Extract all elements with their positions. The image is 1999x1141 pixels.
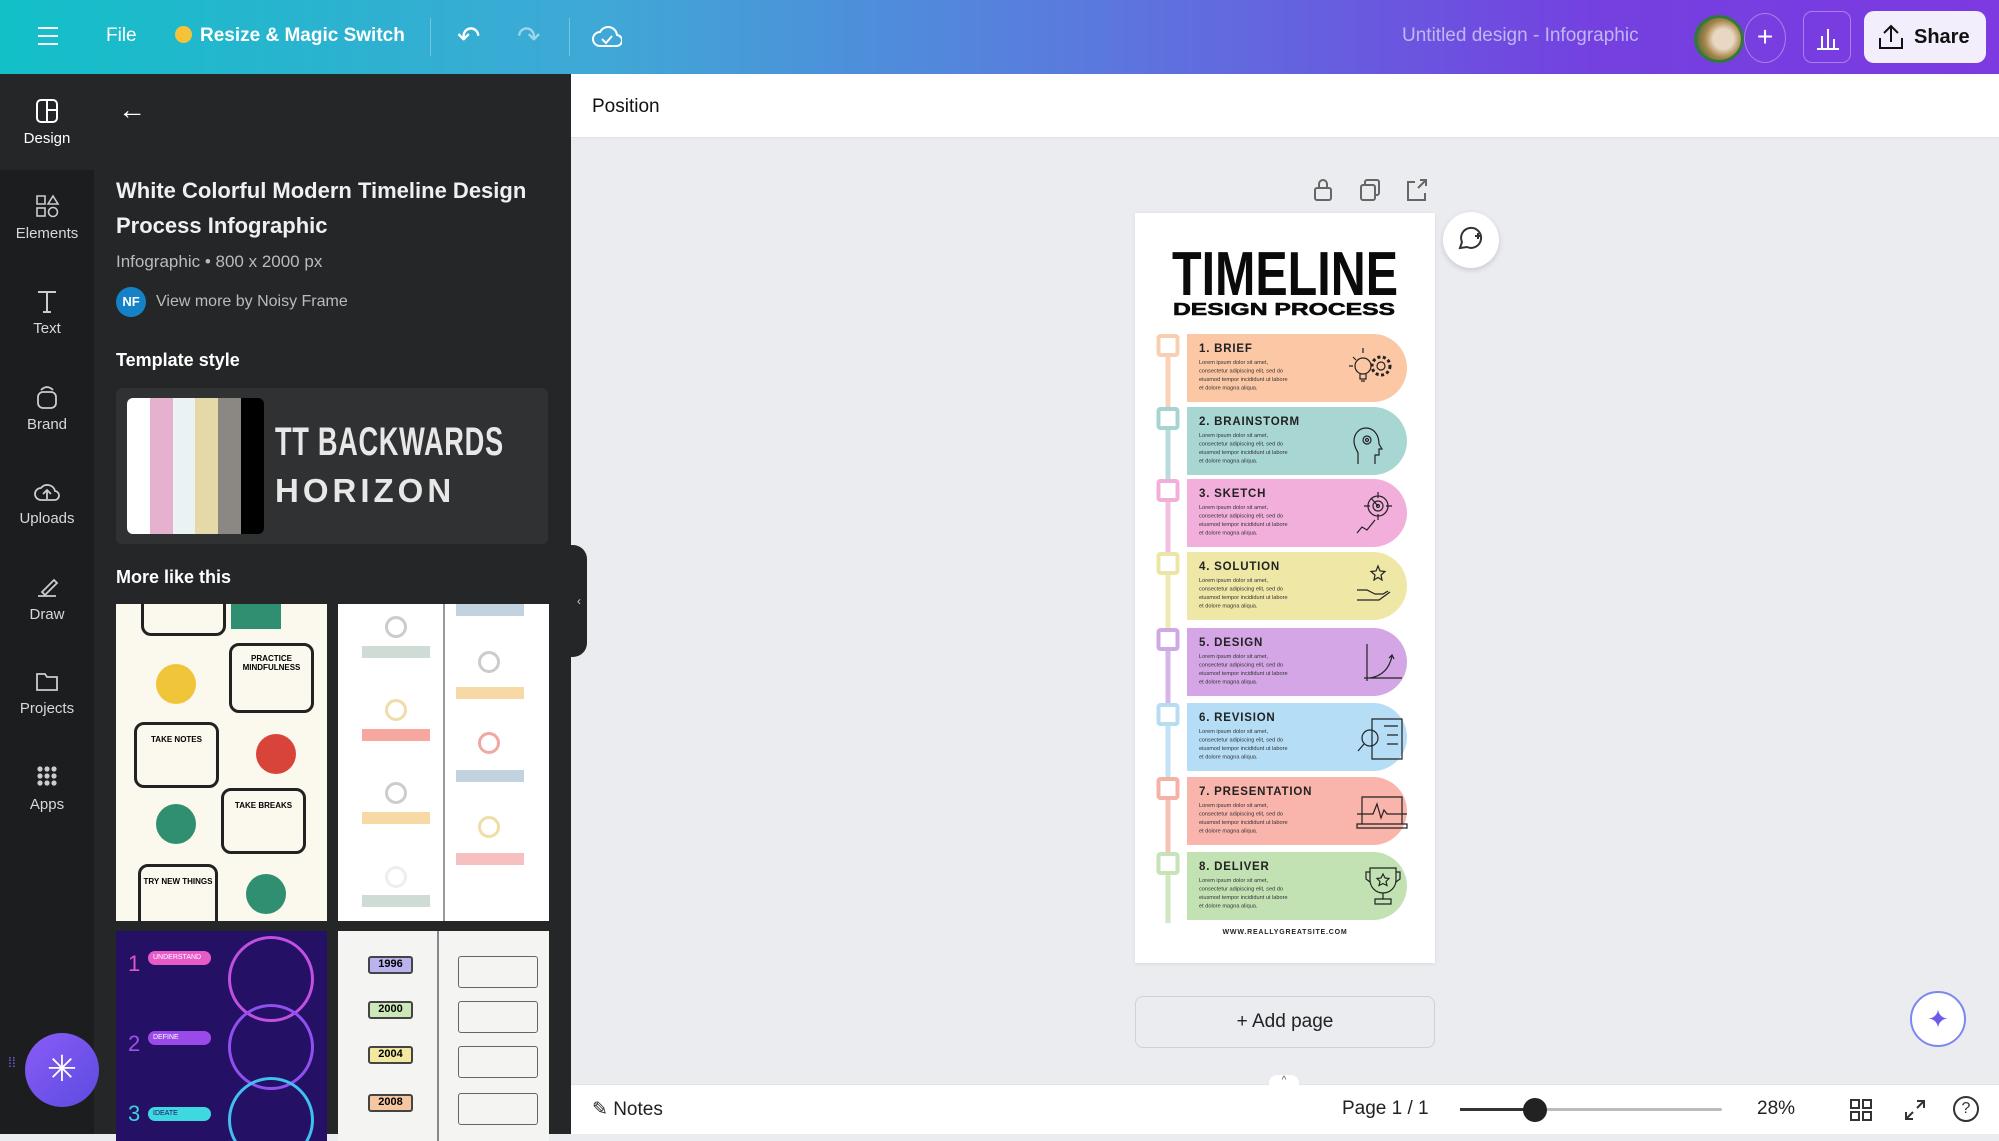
heading: more like this: More like this bbox=[116, 567, 231, 587]
step 1: brief: eiusmod tempor incididunt ut labore bbox=[1199, 377, 1288, 383]
rail: elements: Elements bbox=[16, 225, 78, 242]
step 6: revision: consectetur adipiscing elit, sed do bbox=[1199, 738, 1283, 744]
rail: projects bbox=[20, 673, 74, 717]
rail: elements bbox=[16, 194, 78, 242]
step 2: brainstorm: consectetur adipiscing elit, sed do bbox=[1199, 442, 1283, 448]
back arrow: ← bbox=[118, 94, 146, 125]
thumbnail: neon steps: UNDERSTAND bbox=[153, 954, 201, 961]
step 3: sketch: eiusmod tempor incididunt ut labore bbox=[1199, 522, 1288, 528]
bottom bar: ? bbox=[1962, 1100, 1970, 1117]
step 5: design: Lorem ipsum dolor sit amet, bbox=[1199, 654, 1268, 660]
thumbnail: neon steps: DEFINE bbox=[153, 1034, 179, 1041]
author bbox=[116, 287, 348, 317]
icon: head spiral bbox=[1354, 428, 1382, 464]
position toolbar: Position bbox=[592, 96, 660, 117]
step 3: sketch: 3. SKETCH bbox=[1199, 488, 1266, 500]
zoom level: 28% bbox=[1757, 1098, 1795, 1119]
text: ^ bbox=[1282, 1075, 1286, 1086]
thumbnail: neon steps: 1 bbox=[128, 951, 140, 976]
rail: brand bbox=[27, 386, 67, 433]
button: share: Share bbox=[1914, 26, 1970, 48]
collapse handle: ‹ bbox=[577, 594, 581, 608]
step 6: revision: eiusmod tempor incididunt ut labore bbox=[1199, 746, 1288, 752]
author: View more by Noisy Frame bbox=[156, 293, 348, 310]
font sample: TT BACKWARDS bbox=[275, 420, 504, 464]
thumbnail: neon steps: 3 bbox=[128, 1101, 140, 1126]
step 4: solution: Lorem ipsum dolor sit amet, bbox=[1199, 578, 1268, 584]
rail: uploads bbox=[19, 484, 75, 527]
magic button bbox=[25, 1033, 99, 1107]
rail: text bbox=[33, 291, 61, 337]
step 7: presentation: 7. PRESENTATION bbox=[1199, 786, 1312, 798]
left icon rail bbox=[0, 74, 94, 1134]
add page button bbox=[1135, 996, 1435, 1048]
title: DESIGN PROCESS bbox=[1173, 299, 1395, 319]
notes: ✎ Notes bbox=[592, 1099, 663, 1120]
step 7: presentation bbox=[1158, 777, 1407, 845]
side panel bbox=[94, 74, 571, 1134]
footer url: WWW.REALLYGREATSITE.COM bbox=[1223, 929, 1347, 936]
button: insights bbox=[1803, 11, 1851, 63]
rail: apps bbox=[30, 766, 64, 813]
rail: draw: Draw bbox=[29, 606, 64, 623]
step 1: brief bbox=[1158, 334, 1407, 402]
step 6: revision bbox=[1158, 703, 1407, 771]
zoom slider bbox=[1460, 1108, 1722, 1111]
template meta: Infographic • 800 x 2000 px bbox=[116, 252, 322, 271]
button: add bbox=[1744, 13, 1786, 63]
rail: uploads: Uploads bbox=[19, 510, 75, 527]
step 2: brainstorm bbox=[1158, 407, 1407, 475]
add page button: + Add page bbox=[1237, 1011, 1333, 1032]
step 8: deliver: consectetur adipiscing elit, sed do bbox=[1199, 886, 1283, 892]
top bar bbox=[0, 0, 1999, 74]
position toolbar bbox=[571, 74, 1999, 138]
icon: cloud bbox=[592, 26, 622, 47]
step 8: deliver: 8. DELIVER bbox=[1199, 861, 1270, 873]
color swatches bbox=[127, 398, 264, 534]
template title: White Colorful Modern Timeline Design Process Infographic bbox=[116, 178, 526, 238]
page indicator: Page 1 / 1 bbox=[1342, 1098, 1429, 1119]
icon: bulb and gear bbox=[1349, 348, 1390, 381]
thumbnail: year timeline: 2004 bbox=[378, 1048, 403, 1060]
thumbnail: year timeline bbox=[338, 931, 549, 1141]
step 5: design: eiusmod tempor incididunt ut labore bbox=[1199, 671, 1288, 677]
thumbnail: year timeline: 2000 bbox=[378, 1003, 403, 1015]
bottom bar bbox=[571, 1084, 1999, 1134]
heading: template style: Template style bbox=[116, 350, 240, 370]
step 7: presentation: eiusmod tempor incididunt ut labore bbox=[1199, 820, 1288, 826]
step 8: deliver bbox=[1158, 852, 1407, 920]
assistant button: ✦ bbox=[1927, 1004, 1949, 1034]
menu: file: File bbox=[106, 25, 137, 46]
rail: text: Text bbox=[33, 320, 61, 337]
step 4: solution: et dolore magna aliqua. bbox=[1199, 604, 1258, 610]
icon: target bbox=[1357, 492, 1392, 533]
step 3: sketch bbox=[1158, 479, 1407, 547]
icon: menu bbox=[38, 27, 58, 45]
step 8: deliver: Lorem ipsum dolor sit amet, bbox=[1199, 878, 1268, 884]
step 3: sketch: et dolore magna aliqua. bbox=[1199, 530, 1258, 536]
step 7: presentation: et dolore magna aliqua. bbox=[1199, 828, 1258, 834]
thumbnail: year timeline: 1996 bbox=[378, 958, 403, 970]
rail: design: Design bbox=[24, 130, 70, 147]
step 4: solution: 4. SOLUTION bbox=[1199, 561, 1280, 573]
button: share bbox=[1864, 11, 1986, 63]
rail: design bbox=[24, 99, 70, 147]
step 8: deliver: et dolore magna aliqua. bbox=[1199, 904, 1258, 910]
thumbnail: neon steps: IDEATE bbox=[153, 1110, 178, 1117]
step 5: design: consectetur adipiscing elit, sed do bbox=[1199, 662, 1283, 668]
step 6: revision: et dolore magna aliqua. bbox=[1199, 754, 1258, 760]
step 5: design: 5. DESIGN bbox=[1199, 637, 1263, 649]
thumbnail: year timeline: 2008 bbox=[378, 1096, 403, 1108]
icon: growth chart bbox=[1364, 644, 1402, 681]
text: ⁞⁞ bbox=[8, 1054, 16, 1070]
step 7: presentation: consectetur adipiscing elit, sed do bbox=[1199, 812, 1283, 818]
thumbnail: illustrated tips: TRY NEW THINGS bbox=[144, 877, 212, 886]
step 4: solution bbox=[1158, 552, 1407, 620]
thumbnail: neon steps: 2 bbox=[128, 1031, 140, 1056]
view icons bbox=[1850, 1099, 1872, 1121]
step 1: brief: 1. BRIEF bbox=[1199, 343, 1253, 355]
template style card: HORIZON bbox=[275, 472, 455, 509]
step 4: solution: consectetur adipiscing elit, sed do bbox=[1199, 586, 1283, 592]
comment button bbox=[1443, 212, 1499, 268]
timeline line bbox=[1166, 345, 1170, 923]
thumbnail: vertical timeline bbox=[338, 604, 549, 921]
thumbnail: neon steps bbox=[116, 931, 327, 1141]
step 2: brainstorm: eiusmod tempor incididunt ut labore bbox=[1199, 450, 1288, 456]
template style card bbox=[116, 388, 548, 544]
collapse handle bbox=[571, 545, 587, 657]
page toolbar icons bbox=[1314, 179, 1427, 201]
step 1: brief: consectetur adipiscing elit, sed do bbox=[1199, 368, 1283, 374]
rail: projects: Projects bbox=[20, 700, 74, 717]
avatar bbox=[1694, 15, 1744, 63]
design name: Untitled design - Infographic bbox=[1402, 25, 1639, 46]
step 2: brainstorm: et dolore magna aliqua. bbox=[1199, 458, 1258, 464]
icon: laptop pulse bbox=[1357, 797, 1407, 828]
step 6: revision: 6. REVISION bbox=[1199, 712, 1276, 724]
infographic page bbox=[1135, 213, 1435, 963]
step 1: brief: et dolore magna aliqua. bbox=[1199, 386, 1258, 392]
thumbnail: illustrated tips: TAKE BREAKS bbox=[235, 801, 292, 810]
icon: redo: ↷ bbox=[517, 21, 540, 52]
thumbnail: illustrated tips: PRACTICE MINDFULNESS bbox=[243, 654, 300, 672]
assistant button bbox=[1910, 991, 1966, 1047]
step 6: revision: Lorem ipsum dolor sit amet, bbox=[1199, 729, 1268, 735]
step 4: solution: eiusmod tempor incididunt ut labore bbox=[1199, 595, 1288, 601]
step 5: design: et dolore magna aliqua. bbox=[1199, 680, 1258, 686]
button: add: + bbox=[1757, 21, 1773, 52]
icon: trophy bbox=[1366, 868, 1400, 904]
step 5: design bbox=[1158, 628, 1407, 696]
step 3: sketch: consectetur adipiscing elit, sed do bbox=[1199, 514, 1283, 520]
step 2: brainstorm: 2. BRAINSTORM bbox=[1199, 416, 1300, 428]
rail: draw bbox=[29, 578, 64, 623]
thumbnail: illustrated tips bbox=[116, 604, 327, 921]
step 1: brief: Lorem ipsum dolor sit amet, bbox=[1199, 360, 1268, 366]
author: NF bbox=[122, 294, 140, 309]
step 7: presentation: Lorem ipsum dolor sit amet, bbox=[1199, 803, 1268, 809]
thumbnail: illustrated tips: TAKE NOTES bbox=[151, 735, 202, 744]
rail: brand: Brand bbox=[27, 416, 67, 433]
step 3: sketch: Lorem ipsum dolor sit amet, bbox=[1199, 505, 1268, 511]
icon: undo: ↶ bbox=[457, 21, 480, 52]
step 2: brainstorm: Lorem ipsum dolor sit amet, bbox=[1199, 433, 1268, 439]
icon: hand with star bbox=[1357, 566, 1390, 600]
step 8: deliver: eiusmod tempor incididunt ut labore bbox=[1199, 895, 1288, 901]
rail: apps: Apps bbox=[30, 796, 64, 813]
menu: resize & magic switch: Resize & Magic Switch bbox=[200, 25, 405, 46]
icon: magnifier document bbox=[1358, 719, 1402, 759]
magic button: ✳ bbox=[47, 1048, 77, 1089]
